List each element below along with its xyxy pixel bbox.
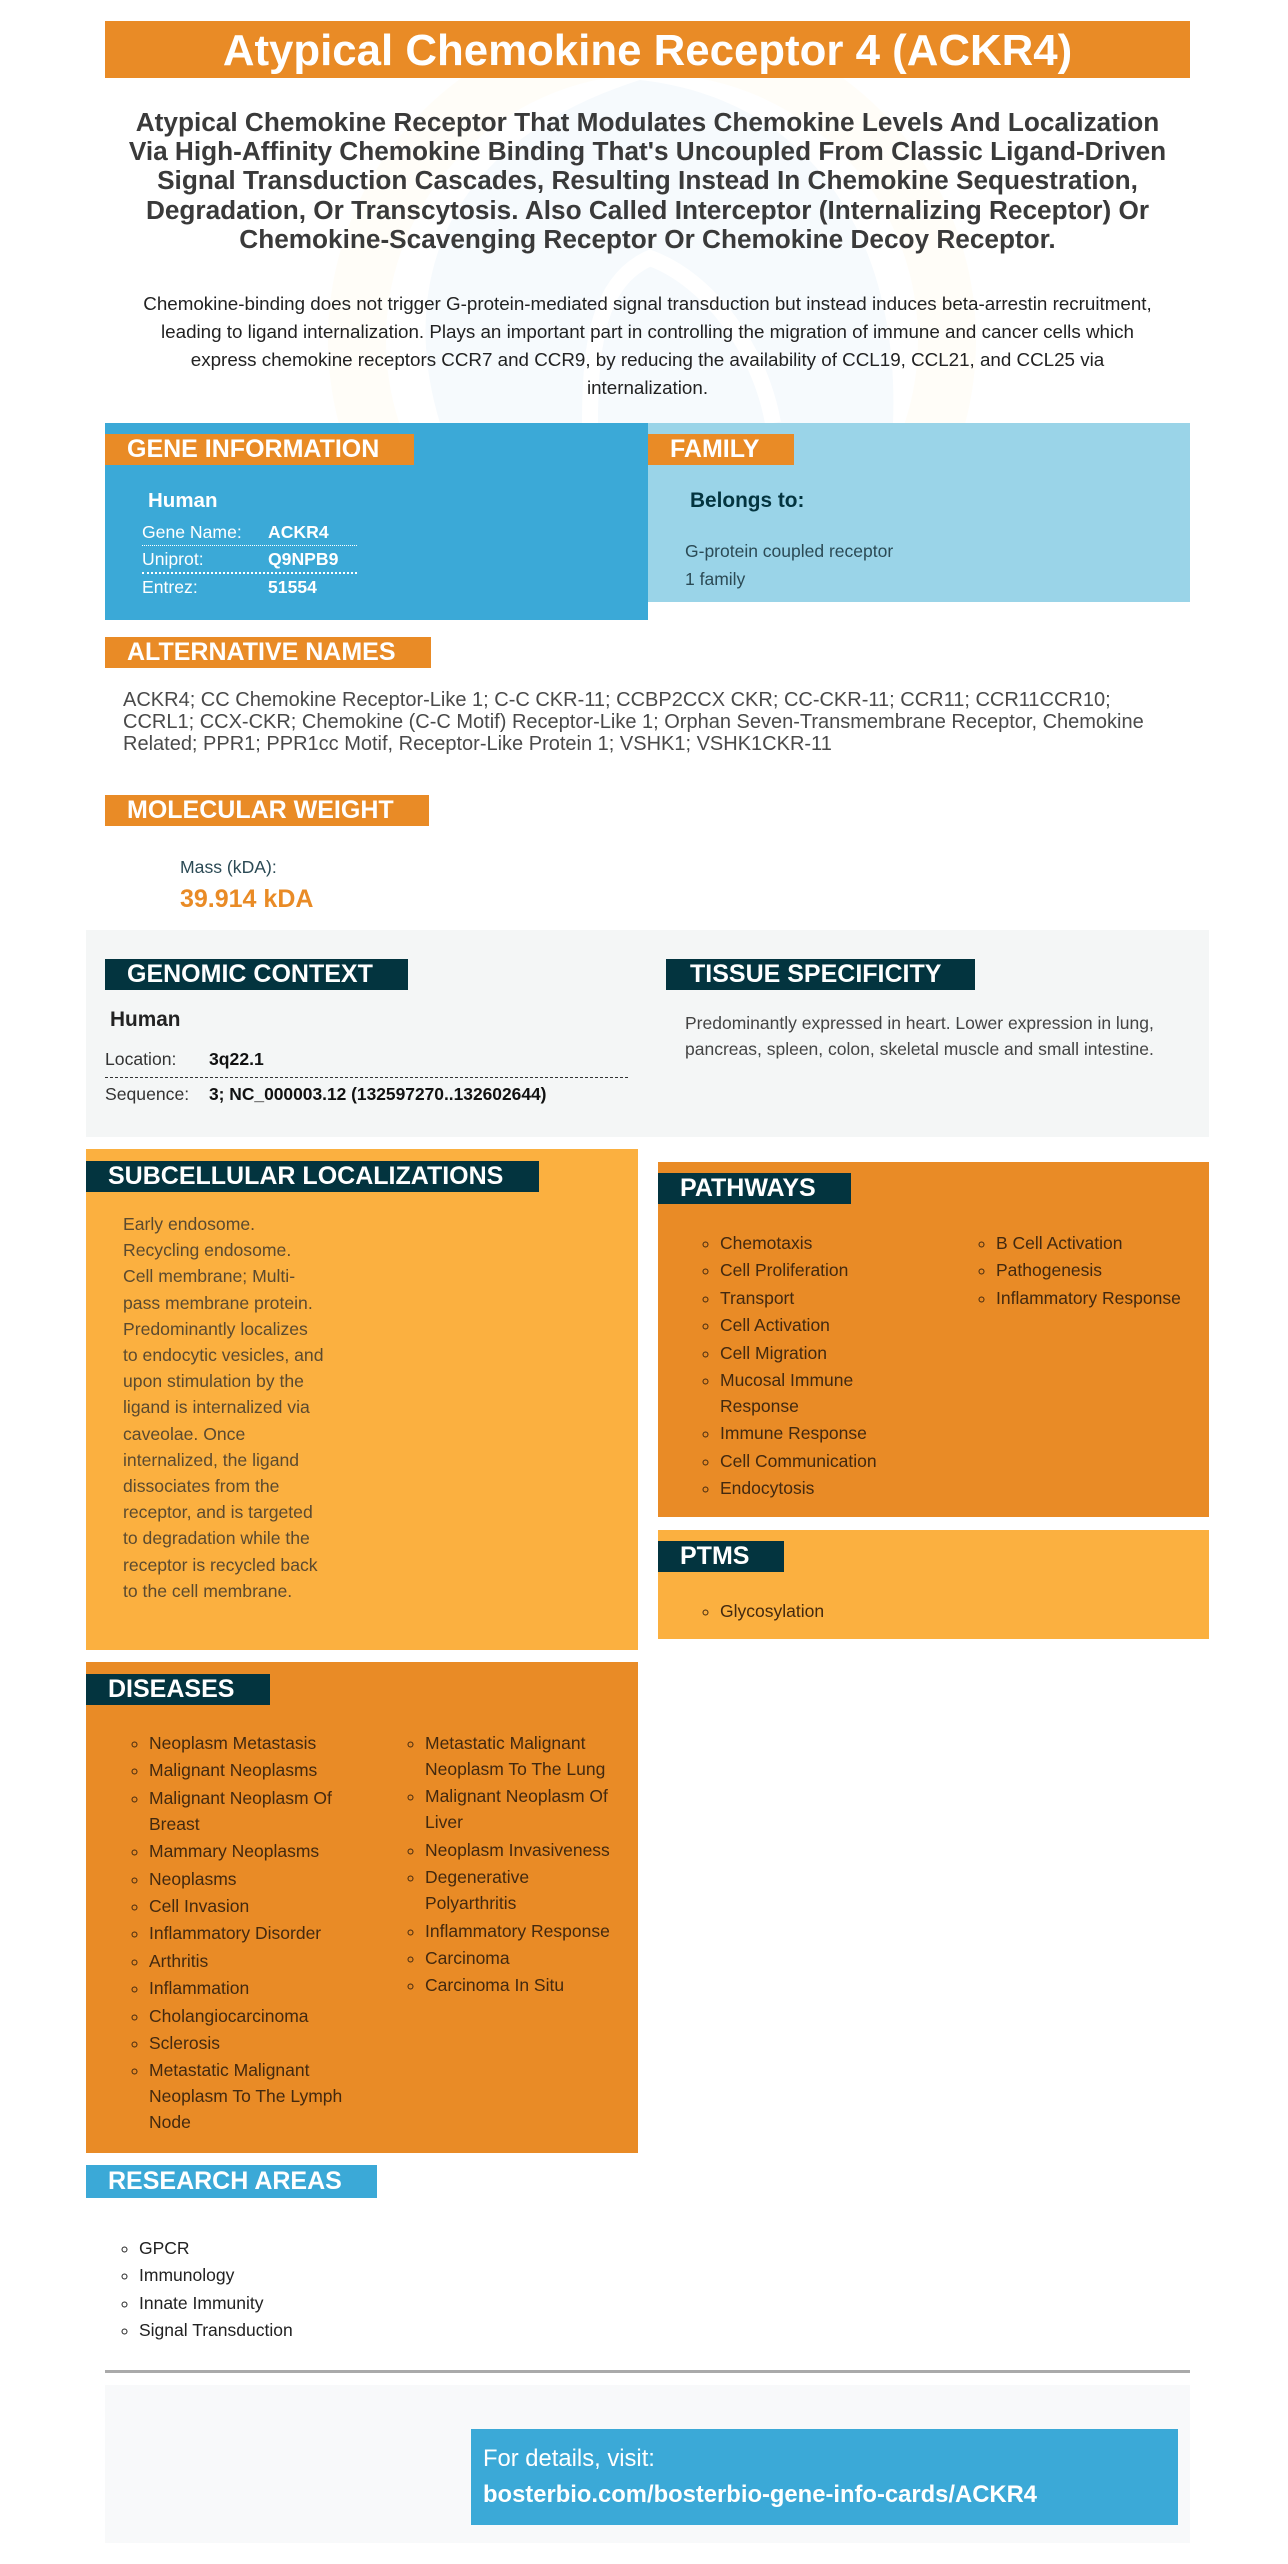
subcellular text: to degradation while the	[123, 1528, 310, 1548]
heading: PTMs: PTMS	[680, 1542, 749, 1570]
panel: molecular weight	[105, 795, 429, 913]
tissue specificity text: Predominantly expressed in heart. Lower expression in lung,	[685, 1013, 1154, 1033]
panel: family	[648, 423, 1190, 602]
subcellular text: Recycling endosome.	[123, 1240, 291, 1260]
pathways list column 1: Response	[720, 1396, 799, 1416]
heading: family	[648, 434, 794, 465]
mass label: Mass (kDA):	[180, 857, 277, 877]
pathways list column 1: Cell Communication	[720, 1451, 877, 1471]
subcellular text: to the cell membrane.	[123, 1581, 292, 1601]
research areas list: GPCR	[139, 2238, 190, 2258]
diseases list column 2: Malignant Neoplasm Of	[425, 1786, 608, 1806]
title	[105, 21, 1190, 78]
gene details table	[142, 522, 357, 597]
pathways list column 1: Immune Response	[720, 1423, 867, 1443]
pathways list column 2: Inflammatory Response	[996, 1288, 1181, 1308]
heading: diseases: DISEASES	[108, 1675, 234, 1703]
heading: family: FAMILY	[670, 435, 759, 463]
diseases list column 2: Liver	[425, 1812, 463, 1832]
subtitle description: Degradation, Or Transcytosis. Also Called Interceptor (Internalizing Receptor) Or	[146, 195, 1149, 225]
diseases list column 2: Neoplasm Invasiveness	[425, 1840, 610, 1860]
alternative names text	[123, 689, 1144, 755]
alternative names text: CCRL1; CCX-CKR; Chemokine (C-C Motif) Receptor-Like 1; Orphan Seven-Transmembrane Receptor, Chemokine	[123, 711, 1144, 733]
pathways list column 1: Transport	[720, 1288, 794, 1308]
heading: diseases	[86, 1674, 270, 1705]
PTMs list: Glycosylation	[720, 1601, 824, 1621]
pathways list column 1: Cell Migration	[720, 1343, 827, 1363]
panel: diseases	[86, 1662, 638, 2153]
title: Atypical Chemokine Receptor 4 (ACKR4)	[223, 26, 1072, 75]
summary paragraph: express chemokine receptors CCR7 and CCR9, by reducing the availability of CCL19, CCL21, and CCL25 via	[191, 349, 1104, 370]
diseases list column 1: Malignant Neoplasm Of	[149, 1788, 332, 1808]
heading: subcellular localizations: SUBCELLULAR LOCALIZATIONS	[108, 1162, 503, 1190]
summary paragraph: internalization.	[587, 377, 708, 398]
panel: subcellular localizations	[86, 1149, 638, 1650]
subcellular text: pass membrane protein.	[123, 1293, 313, 1313]
research areas list: Immunology	[139, 2265, 234, 2285]
panel: research areas	[86, 2165, 377, 2340]
diseases list column 2: Polyarthritis	[425, 1893, 516, 1913]
pathways list column 2: Pathogenesis	[996, 1260, 1102, 1280]
panel: genomic context and tissue specificity	[86, 930, 1209, 1137]
research areas list	[122, 2238, 293, 2340]
pathways list column 1: Cell Activation	[720, 1315, 830, 1335]
gene details table: Q9NPB9	[268, 549, 338, 569]
panel: alternative names	[105, 637, 1144, 755]
panel: pathways	[658, 1162, 1209, 1517]
summary paragraph: Chemokine-binding does not trigger G-protein-mediated signal transduction but instead induces beta-arrestin recruitment,	[143, 293, 1152, 314]
diseases list column 1: Metastatic Malignant	[149, 2060, 310, 2080]
family text	[685, 541, 893, 589]
heading: pathways: PATHWAYS	[680, 1174, 816, 1202]
diseases list column 2: Metastatic Malignant	[425, 1733, 586, 1753]
diseases list column 1: Neoplasm To The Lymph	[149, 2086, 342, 2106]
pathways list column 1	[702, 1233, 877, 1498]
subtitle description: Signal Transduction Cascades, Resulting Instead In Chemokine Sequestration,	[157, 165, 1138, 195]
diseases list column 1: Arthritis	[149, 1951, 208, 1971]
research areas list: Innate Immunity	[139, 2293, 264, 2313]
gene details table: ACKR4	[268, 522, 329, 542]
genomic details table	[105, 1049, 628, 1104]
mass value: 39.914 kDA	[180, 885, 313, 913]
callout: details link	[471, 2429, 1178, 2525]
pathways list column 1: Mucosal Immune	[720, 1370, 853, 1390]
subcellular text: to endocytic vesicles, and	[123, 1345, 323, 1365]
diseases list column 2: Inflammatory Response	[425, 1921, 610, 1941]
heading: tissue specificity: TISSUE SPECIFICITY	[690, 960, 941, 988]
diseases list column 1: Inflammatory Disorder	[149, 1923, 321, 1943]
subcellular text: caveolae. Once	[123, 1424, 245, 1444]
gene details table: Entrez:	[142, 577, 198, 597]
diseases list column 2: Carcinoma	[425, 1948, 510, 1968]
heading: genomic context: GENOMIC CONTEXT	[127, 960, 373, 988]
tissue specificity text: pancreas, spleen, colon, skeletal muscle and small intestine.	[685, 1039, 1154, 1059]
heading: pathways	[658, 1173, 851, 1204]
research areas list: Signal Transduction	[139, 2320, 293, 2340]
diseases list column 2: Carcinoma In Situ	[425, 1975, 564, 1995]
diseases list column 2	[408, 1733, 610, 1995]
diseases list column 1: Inflammation	[149, 1978, 249, 1998]
tissue specificity text	[685, 1013, 1154, 1059]
diseases list column 1: Cholangiocarcinoma	[149, 2006, 309, 2026]
diseases list column 2: Neoplasm To The Lung	[425, 1759, 605, 1779]
belongs to label: Belongs to:	[690, 489, 804, 512]
details url: bosterbio.com/bosterbio-gene-info-cards/ACKR4	[483, 2481, 1037, 2508]
subcellular text: ligand is internalized via	[123, 1397, 310, 1417]
family text: 1 family	[685, 569, 745, 589]
heading: molecular weight: MOLECULAR WEIGHT	[127, 796, 394, 824]
genomic details table: Sequence:	[105, 1084, 189, 1104]
subcellular text: Predominantly localizes	[123, 1319, 308, 1339]
panel: gene information	[105, 423, 648, 620]
heading: research areas	[86, 2165, 377, 2198]
alternative names text: Related; PPR1; PPR1cc Motif, Receptor-Like Protein 1; VSHK1; VSHK1CKR-11	[123, 733, 832, 755]
details label: For details, visit:	[483, 2445, 655, 2472]
divider rule	[105, 2370, 1190, 2373]
subcellular text: internalized, the ligand	[123, 1450, 299, 1470]
summary paragraph: leading to ligand internalization. Plays an important part in controlling the migration of immune and cancer cells which	[161, 321, 1134, 342]
diseases list column 1: Neoplasms	[149, 1869, 237, 1889]
diseases list column 1: Node	[149, 2112, 191, 2132]
diseases list column 1: Breast	[149, 1814, 200, 1834]
gene details table: 51554	[268, 577, 317, 597]
diseases list column 1: Mammary Neoplasms	[149, 1841, 319, 1861]
subcellular text: upon stimulation by the	[123, 1371, 304, 1391]
diseases list column 1	[132, 1733, 342, 2132]
subcellular text: dissociates from the	[123, 1476, 279, 1496]
background watermark logo	[426, 80, 893, 423]
panel: PTMs	[658, 1530, 1209, 1639]
heading: research areas: RESEARCH AREAS	[108, 2167, 342, 2195]
subcellular text	[123, 1214, 323, 1601]
diseases list column 1: Cell Invasion	[149, 1896, 249, 1916]
diseases list column 1: Neoplasm Metastasis	[149, 1733, 316, 1753]
pathways list column 2	[978, 1233, 1181, 1308]
genomic details table: 3; NC_000003.12 (132597270..132602644)	[209, 1084, 546, 1104]
heading: gene information: GENE INFORMATION	[127, 435, 379, 463]
diseases list column 1: Sclerosis	[149, 2033, 220, 2053]
subtitle description: Atypical Chemokine Receptor That Modulates Chemokine Levels And Localization	[136, 107, 1159, 137]
genomic details table: Location:	[105, 1049, 176, 1069]
pathways list column 2: B Cell Activation	[996, 1233, 1122, 1253]
subcellular text: receptor, and is targeted	[123, 1502, 313, 1522]
subtitle description: Chemokine-Scavenging Receptor Or Chemokine Decoy Receptor.	[239, 224, 1056, 254]
heading: alternative names: ALTERNATIVE NAMES	[127, 638, 396, 666]
pathways list column 1: Chemotaxis	[720, 1233, 812, 1253]
genomic details table: 3q22.1	[209, 1049, 264, 1069]
pathways list column 1: Cell Proliferation	[720, 1260, 848, 1280]
panel: footer	[105, 2385, 1190, 2543]
subcellular text: Early endosome.	[123, 1214, 255, 1234]
subtitle description	[129, 107, 1166, 254]
heading: PTMs	[658, 1541, 784, 1572]
diseases list column 1: Malignant Neoplasms	[149, 1760, 317, 1780]
species label: Human	[148, 489, 217, 512]
diseases list column 2: Degenerative	[425, 1867, 529, 1887]
subcellular text: Cell membrane; Multi-	[123, 1266, 295, 1286]
gene details table: Gene Name:	[142, 522, 242, 542]
gene details table: Uniprot:	[142, 549, 204, 569]
subtitle description: Via High-Affinity Chemokine Binding That's Uncoupled From Classic Ligand-Driven	[129, 136, 1166, 166]
summary paragraph	[143, 293, 1152, 398]
subcellular text: receptor is recycled back	[123, 1555, 318, 1575]
species label: Human	[110, 1008, 180, 1031]
family text: G-protein coupled receptor	[685, 541, 893, 561]
pathways list column 1: Endocytosis	[720, 1478, 814, 1498]
alternative names text: ACKR4; CC Chemokine Receptor-Like 1; C-C CKR-11; CCBP2CCX CKR; CC-CKR-11; CCR11; CCR11CCR10;	[123, 689, 1111, 711]
